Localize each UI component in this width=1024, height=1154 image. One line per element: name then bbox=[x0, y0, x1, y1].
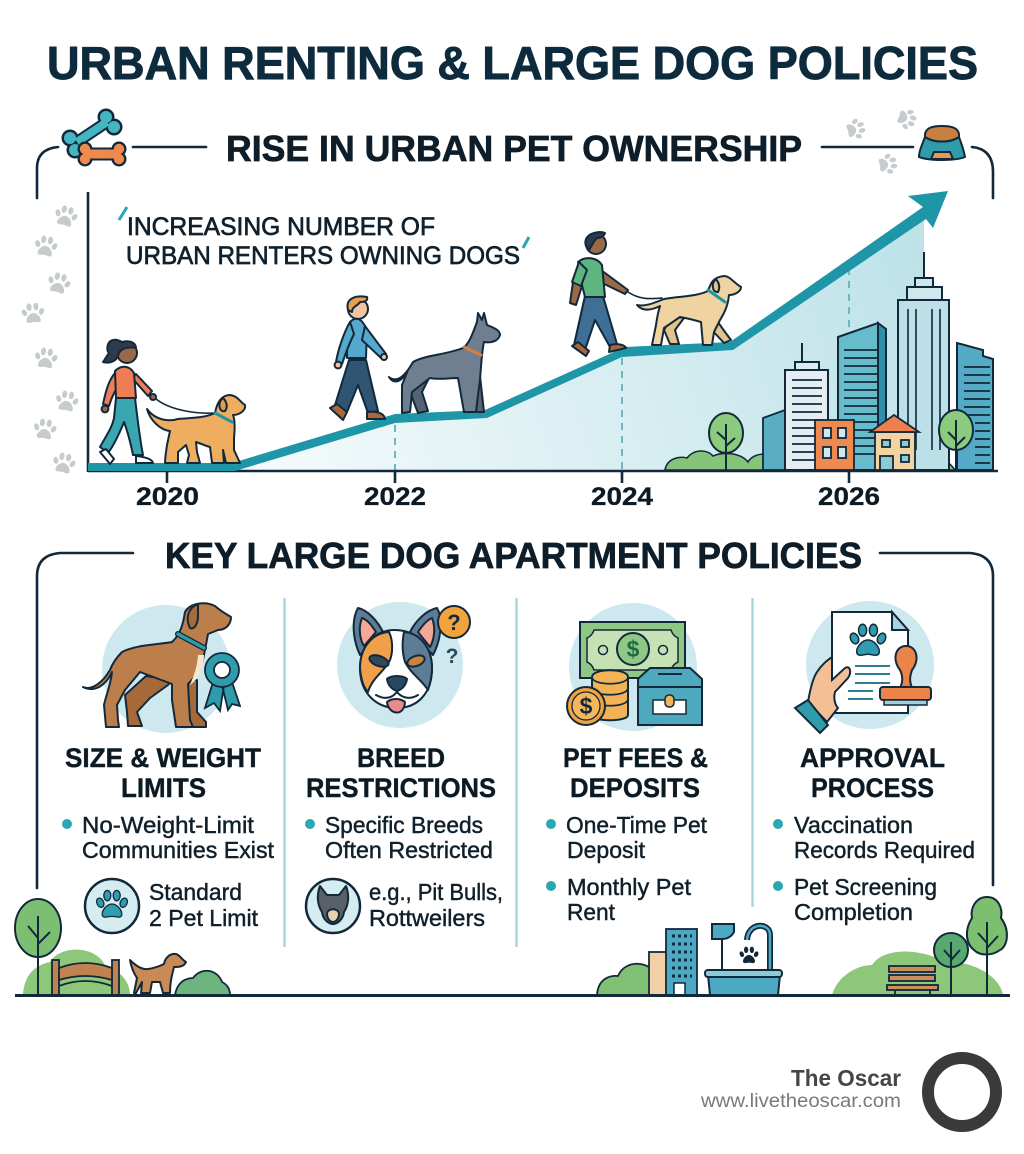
bullet: one-time pet deposit bbox=[546, 812, 708, 863]
bullet: specific breeds: Specific Breeds bbox=[325, 812, 483, 838]
orange building bbox=[815, 420, 854, 470]
bullet: monthly pet rent: Monthly Pet bbox=[567, 874, 692, 900]
brand url: www.livetheoscar.com bbox=[700, 1091, 901, 1112]
light tower bbox=[785, 343, 828, 470]
year labels: 2022 bbox=[364, 483, 426, 511]
heading: size and weight limits: SIZE & WEIGHT bbox=[65, 743, 261, 773]
icon: bones bbox=[62, 108, 126, 166]
panel frame: policies bbox=[37, 553, 993, 888]
tall tower bbox=[898, 252, 949, 470]
bullet: vaccination records: Vaccination bbox=[794, 812, 913, 838]
panel: rise in urban pet ownership bbox=[20, 106, 998, 511]
bullet: one-time pet deposit: One-Time Pet bbox=[566, 812, 708, 838]
chart annotation: URBAN RENTERS OWNING DOGS bbox=[126, 242, 520, 270]
ground line bbox=[15, 994, 1010, 997]
callout: standard 2 pet limit bbox=[85, 879, 259, 933]
icon: money, coins and deposit box bbox=[567, 603, 702, 731]
icon: grey paw prints near bowl bbox=[845, 106, 919, 176]
logo ring bbox=[928, 1058, 996, 1126]
walker 2024: man with yellow dog bbox=[570, 232, 741, 356]
city skyline bbox=[665, 252, 993, 470]
column: breed restrictions bbox=[305, 602, 503, 933]
footer brand bbox=[700, 1058, 996, 1126]
icon: dog with rosette bbox=[83, 603, 240, 733]
heading: size and weight limits bbox=[65, 743, 261, 803]
heading: breed restrictions: BREED bbox=[357, 743, 445, 773]
bullet: pet screening: Completion bbox=[794, 899, 913, 925]
bullet: vaccination records bbox=[773, 812, 975, 863]
back building bbox=[763, 410, 785, 470]
heading: pet fees and deposits bbox=[563, 743, 708, 803]
bullet: monthly pet rent bbox=[546, 874, 692, 925]
bullet: monthly pet rent: Rent bbox=[567, 899, 616, 925]
year labels: 2026 bbox=[818, 483, 880, 511]
callout: standard 2 pet limit: 2 Pet Limit bbox=[149, 905, 259, 931]
icon: questioning dog face: ? bbox=[447, 610, 461, 635]
heading: breed restrictions: RESTRICTIONS bbox=[306, 773, 496, 803]
callout: example breeds: Rottweilers bbox=[369, 905, 485, 931]
trend arrow bbox=[88, 191, 948, 471]
icon: questioning dog face: ? bbox=[446, 645, 458, 668]
small dog bbox=[130, 954, 186, 993]
city corner: buildings and pet wash bbox=[597, 924, 782, 995]
heading: approval process bbox=[800, 743, 945, 803]
bushes bbox=[665, 451, 955, 470]
heading: size and weight limits: LIMITS bbox=[121, 773, 206, 803]
column dividers bbox=[284, 598, 752, 947]
heading: rise in urban pet ownership: RISE IN URBAN PET OWNERSHIP bbox=[226, 128, 802, 169]
brand name: The Oscar bbox=[791, 1065, 901, 1091]
heading: key large dog apartment policies: KEY LARGE DOG APARTMENT POLICIES bbox=[165, 535, 862, 576]
park: right bushes, bench and trees bbox=[832, 897, 1007, 995]
icon: money, coins and deposit box: $ bbox=[580, 693, 593, 719]
right tower bbox=[957, 343, 993, 470]
bullet: no weight limit: No-Weight-Limit bbox=[82, 812, 255, 838]
tree bbox=[939, 410, 973, 470]
icon: questioning dog face bbox=[337, 602, 470, 728]
main title: URBAN RENTING & LARGE DOG POLICIES bbox=[47, 37, 978, 89]
bullet: no weight limit bbox=[62, 812, 275, 863]
bullet: pet screening: Pet Screening bbox=[794, 874, 937, 900]
column: size and weight limits bbox=[62, 603, 275, 933]
bullet: pet screening bbox=[773, 874, 937, 925]
callout: standard 2 pet limit: Standard bbox=[149, 879, 242, 905]
chart: pet ownership growth bbox=[88, 191, 998, 483]
scene: ground strip with park and buildings bbox=[15, 897, 1010, 996]
year labels bbox=[136, 483, 880, 511]
panel frame: top section bracket bbox=[37, 147, 993, 198]
bullet: vaccination records: Records Required bbox=[794, 837, 975, 863]
heading: approval process: PROCESS bbox=[811, 773, 934, 803]
chart annotation bbox=[119, 207, 529, 270]
heading: pet fees and deposits: PET FEES & bbox=[563, 743, 708, 773]
tree bbox=[709, 413, 743, 470]
bullet: specific breeds: Often Restricted bbox=[325, 837, 493, 863]
teal tower bbox=[838, 323, 886, 470]
dashed year guides bbox=[395, 268, 849, 471]
heading: breed restrictions bbox=[306, 743, 496, 803]
icon: document, stamp and hand bbox=[795, 601, 934, 733]
bullet: no weight limit: Communities Exist bbox=[82, 837, 275, 863]
heading: approval process: APPROVAL bbox=[800, 743, 945, 773]
icon: money, coins and deposit box: $ bbox=[627, 636, 640, 662]
heading: pet fees and deposits: DEPOSITS bbox=[570, 773, 700, 803]
column: approval process bbox=[773, 601, 975, 925]
area under trend bbox=[235, 220, 924, 471]
callout: example breeds bbox=[306, 879, 503, 933]
year labels: 2020 bbox=[136, 483, 199, 511]
chart annotation: INCREASING NUMBER OF bbox=[127, 213, 435, 241]
icon: food bowl bbox=[919, 126, 965, 160]
decorative paw trail bbox=[20, 203, 81, 475]
walker 2022: man with grey dog bbox=[330, 296, 500, 420]
axes bbox=[88, 192, 998, 483]
column: pet fees and deposits bbox=[546, 603, 708, 925]
bullet: one-time pet deposit: Deposit bbox=[567, 837, 646, 863]
bullet: specific breeds bbox=[305, 812, 493, 863]
park: left bushes, gate and tree bbox=[15, 899, 230, 995]
callout: example breeds: e.g., Pit Bulls, bbox=[369, 879, 503, 905]
panel: key large dog apartment policies bbox=[37, 535, 993, 947]
walker 2020: woman with golden dog bbox=[100, 340, 245, 464]
house bbox=[870, 415, 919, 470]
year labels: 2024 bbox=[591, 483, 653, 511]
